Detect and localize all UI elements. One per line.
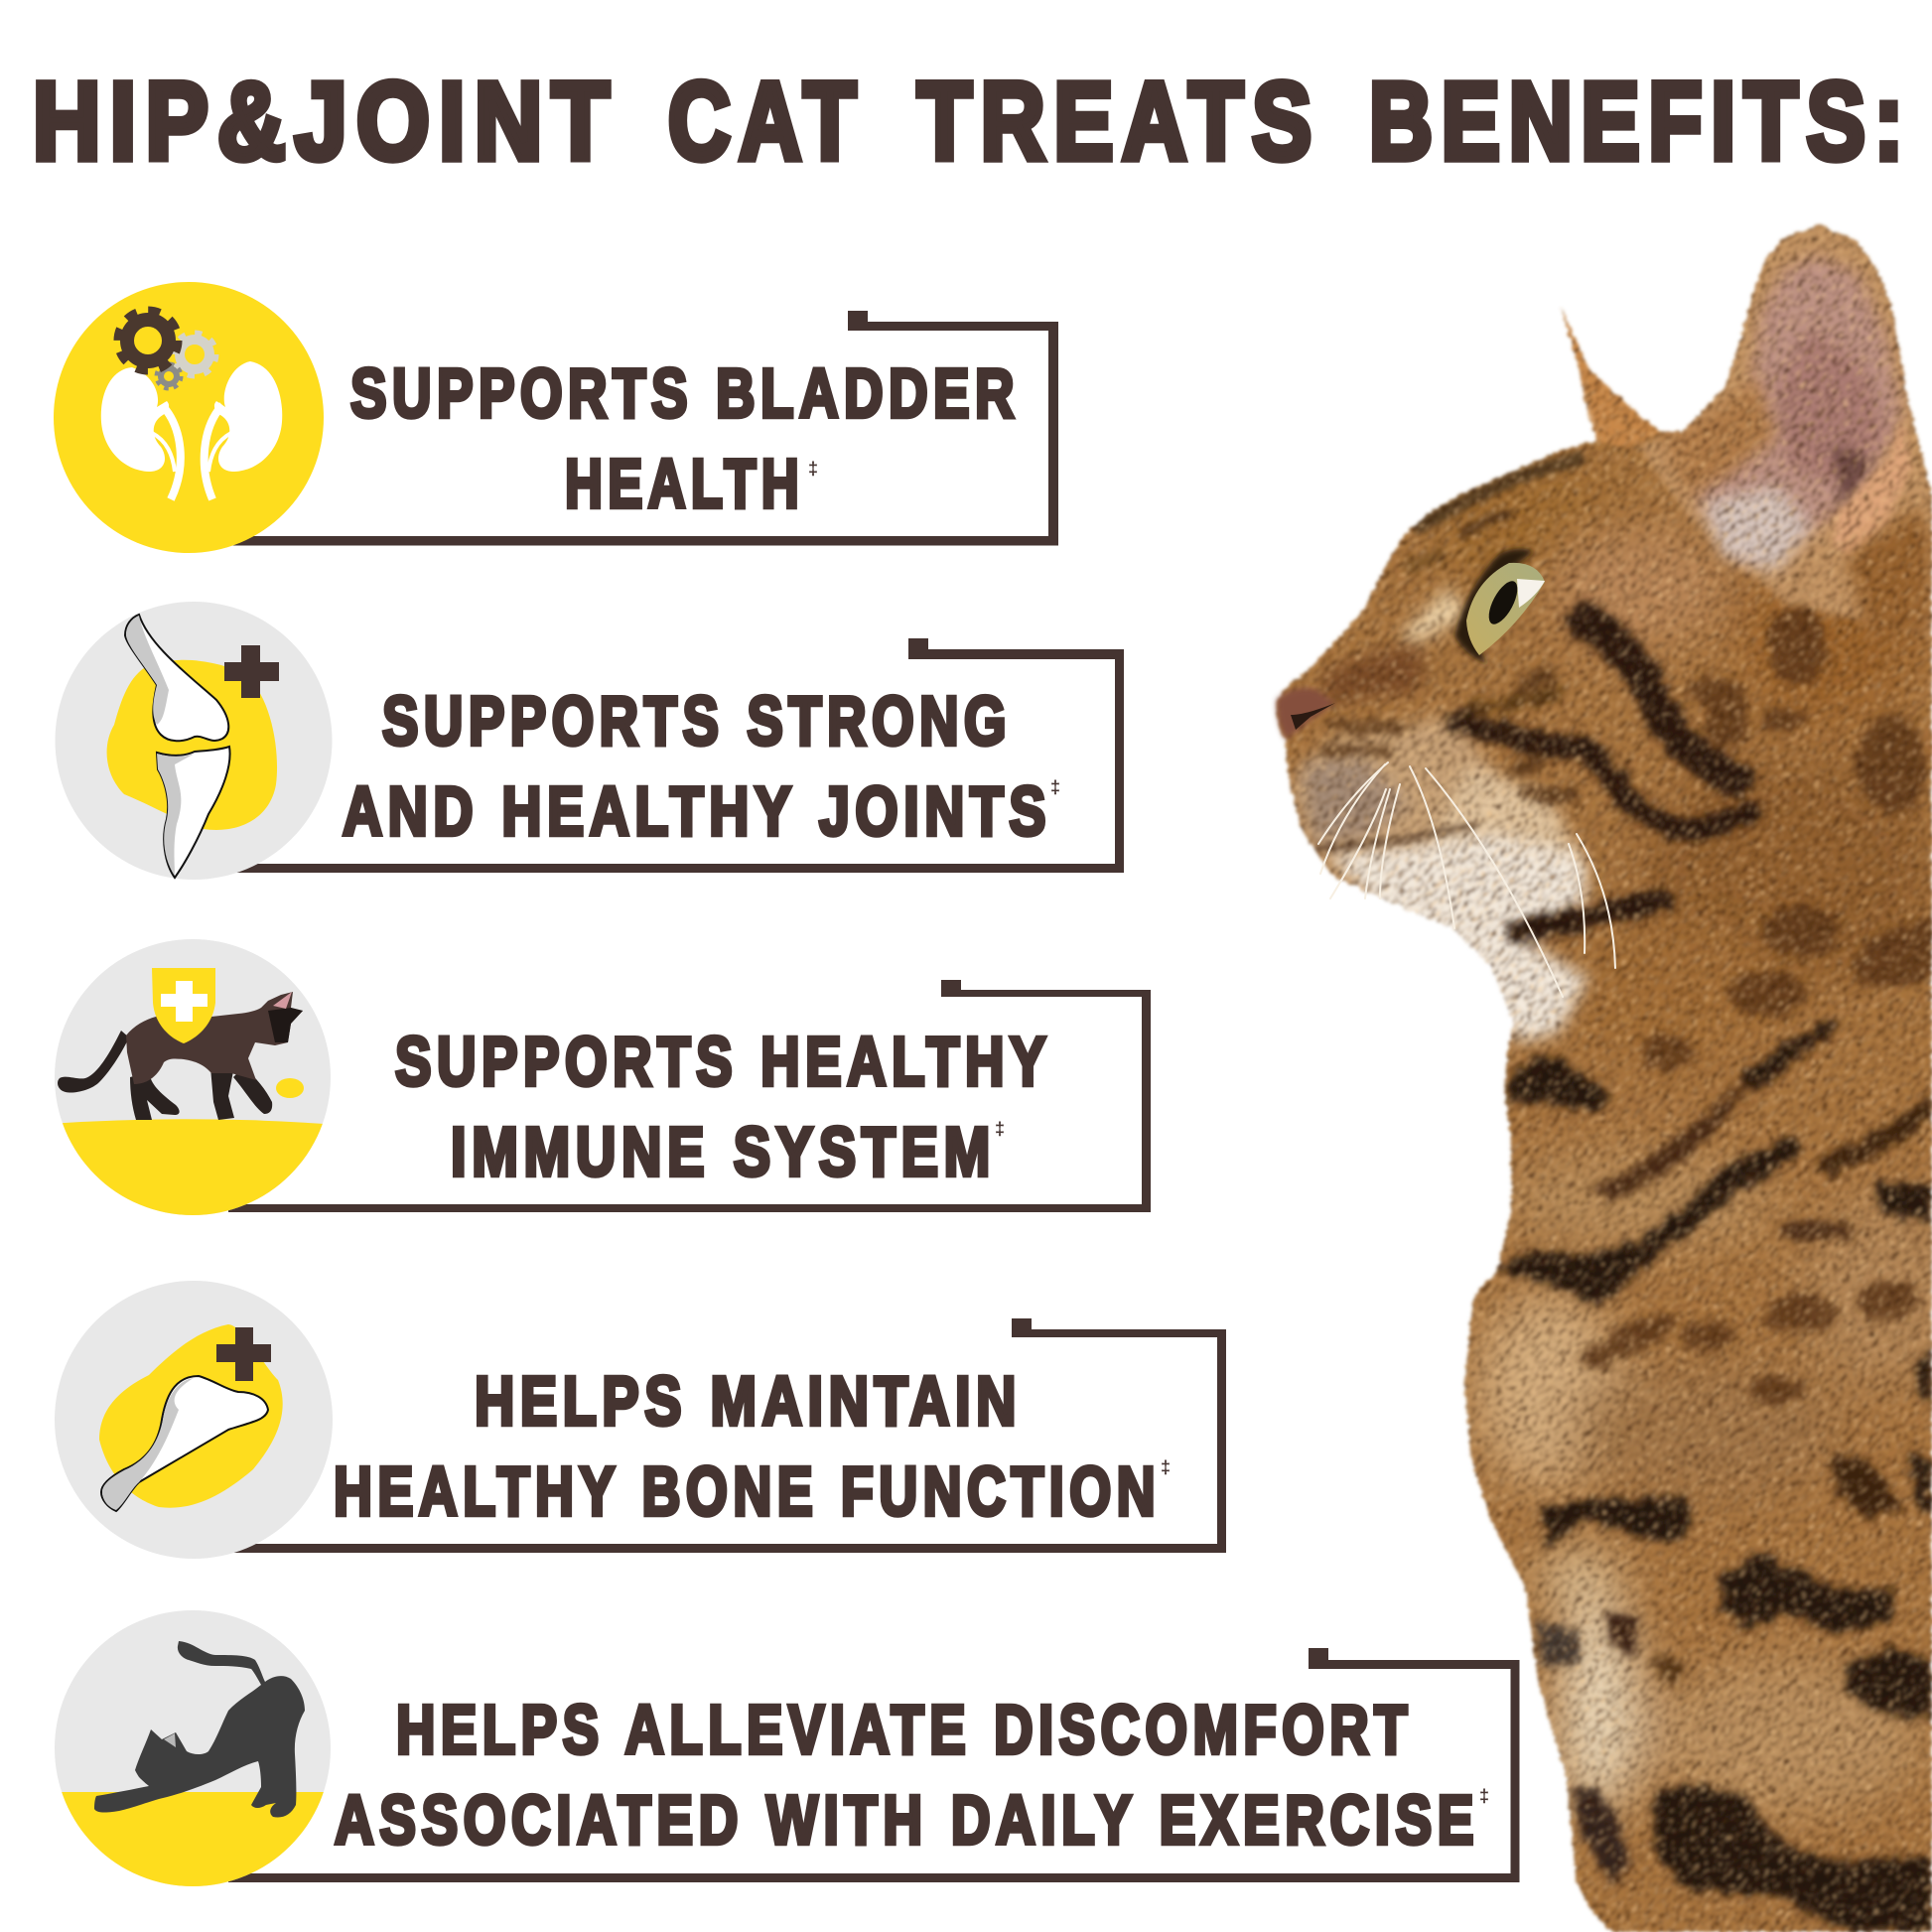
frame 5 [228, 1648, 1519, 1882]
text: strong and healthy joints: SUPPORTS STRONG [382, 682, 1012, 759]
panel: supports bladder health [54, 282, 1058, 553]
muzzle and chest light fur [1290, 715, 1499, 877]
text: alleviate discomfort: HELPS ALLEVIATE DISCOMFORT [396, 1691, 1413, 1768]
text: healthy immune system: SUPPORTS HEALTHY [395, 1023, 1051, 1100]
title [33, 61, 1912, 183]
icon: cat with shield [50, 939, 338, 1221]
panel: healthy bone function [55, 1281, 1226, 1559]
ears [1561, 307, 1660, 447]
text: healthy bone function: HELPS MAINTAIN [475, 1362, 1022, 1440]
dark markings [1325, 606, 1932, 1932]
icon: kidneys and gears [54, 282, 324, 553]
frame 1 [228, 311, 1058, 546]
forehead markings [1410, 459, 1579, 566]
frame 3 [228, 980, 1151, 1212]
frame 4 [231, 1318, 1226, 1553]
icon: stretching cat [50, 1610, 338, 1896]
icon: knee joint [56, 602, 332, 880]
panel: supports bladder health: ‡ [808, 459, 818, 479]
soft brown spots [1573, 606, 1932, 1404]
panel: healthy immune system [50, 939, 1151, 1221]
panel: alleviate discomfort: ‡ [1479, 1786, 1489, 1806]
nose bridge highlight [1400, 586, 1469, 650]
fur colour areas [1440, 477, 1932, 1817]
panel: strong and healthy joints: ‡ [1050, 777, 1060, 797]
text: supports bladder health: SUPPORTS BLADDER [350, 354, 1020, 432]
panel: alleviate discomfort: ASSOCIATED WITH DAILY EXERCISE [335, 1781, 1479, 1859]
panel: strong and healthy joints: AND HEALTHY JOINTS [343, 772, 1051, 850]
title: HIP&JOINT [33, 61, 619, 183]
title: CAT [668, 61, 865, 183]
panel: supports bladder health: HEALTH [565, 445, 804, 522]
frame 2 [228, 638, 1124, 873]
panel: healthy bone function: ‡ [1161, 1457, 1171, 1477]
panel: alleviate discomfort [50, 1610, 1519, 1896]
face stripes [1325, 621, 1749, 931]
photo: bengal cat in profile [1261, 199, 1932, 1932]
body stripes [1498, 1018, 1932, 1932]
title: TREATS [917, 61, 1320, 183]
cat whiskers [1318, 762, 1615, 997]
cat eye [1454, 548, 1545, 665]
icon: bone [55, 1281, 333, 1559]
panel: healthy bone function: HEALTHY BONE FUNCTION [334, 1452, 1161, 1530]
panel: healthy immune system: ‡ [995, 1119, 1005, 1139]
fur texture [1261, 199, 1932, 1932]
panel: healthy immune system: IMMUNE SYSTEM [451, 1113, 996, 1190]
cat nose [1277, 688, 1335, 740]
panel: strong and healthy joints [56, 602, 1124, 880]
